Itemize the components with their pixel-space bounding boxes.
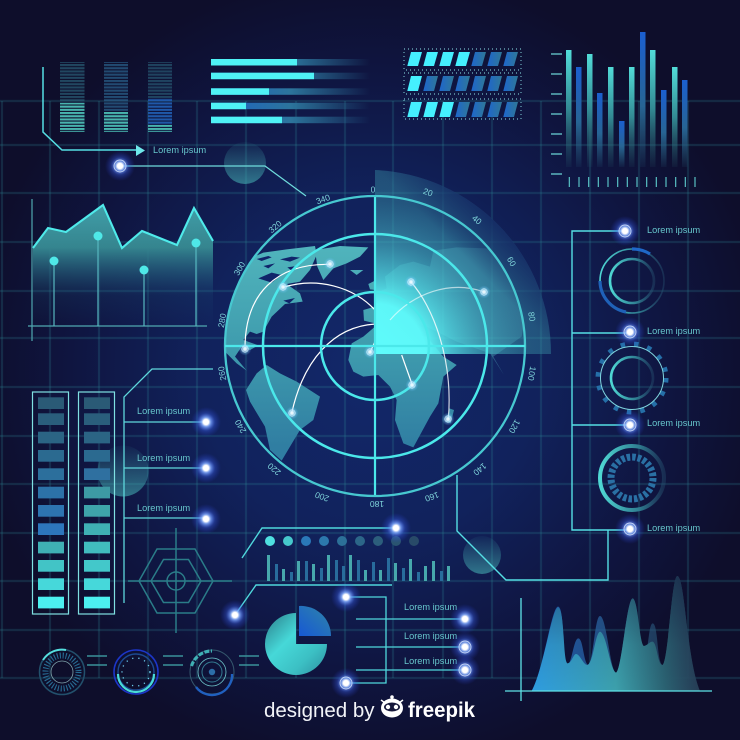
meter left	[32, 392, 68, 614]
degree labels: 20	[422, 186, 434, 199]
panel: central radar with world map	[216, 170, 551, 509]
degree labels: 160	[423, 490, 440, 504]
degree labels: 100	[526, 366, 538, 382]
gauge dashes	[87, 656, 259, 665]
icon: freepik mascot	[381, 695, 403, 718]
decorative translucent circle top	[224, 142, 266, 184]
eurasia	[385, 248, 523, 374]
nodes	[331, 582, 480, 698]
degree labels: 240	[232, 418, 248, 435]
panel: dotted slanted level meter	[404, 49, 521, 119]
peaks	[532, 576, 700, 691]
meter row 3	[407, 102, 518, 117]
connector lines	[124, 369, 213, 603]
degree labels: 140	[471, 461, 489, 478]
connector lines	[457, 231, 630, 580]
labels: Lorem ipsum	[404, 656, 457, 666]
mini bars	[267, 555, 450, 581]
ghost circle	[463, 536, 501, 574]
radar rings	[225, 196, 525, 496]
gauge 3	[190, 650, 234, 695]
map nodes	[238, 258, 490, 426]
labels	[404, 602, 457, 666]
gauge ring 3	[600, 446, 664, 510]
credit line: freepik	[408, 699, 475, 722]
degree labels: 60	[505, 255, 518, 268]
sweep sector	[375, 170, 551, 354]
gauge ring 2	[598, 344, 666, 412]
panel: right gauges and labels	[457, 216, 700, 580]
node	[381, 513, 411, 543]
africa and south europe	[348, 327, 457, 447]
labels: Lorem ipsum	[404, 631, 457, 641]
panel: left level meters and labels	[32, 369, 221, 614]
area outline	[33, 205, 213, 248]
degree labels: 300	[232, 260, 247, 277]
panel: horizontal progress bars	[211, 59, 370, 123]
degree labels: 0	[371, 184, 376, 194]
north america	[220, 246, 317, 371]
node	[220, 600, 250, 630]
labels: Lorem ipsum	[647, 523, 700, 533]
degree labels: 340	[315, 192, 332, 206]
bracket line	[346, 597, 465, 683]
panel: bottom small gauges	[40, 650, 259, 695]
meter right	[78, 392, 114, 614]
degree labels: 180	[370, 499, 384, 509]
europe	[350, 270, 375, 323]
panel: striped column chart with arrow	[43, 62, 206, 156]
label: Lorem ipsum	[153, 145, 206, 155]
background grid	[0, 101, 740, 678]
labels: Lorem ipsum	[137, 406, 190, 416]
degree labels: 40	[470, 213, 484, 227]
greenland	[315, 246, 368, 280]
labels: Lorem ipsum	[647, 225, 700, 235]
degree labels: 320	[266, 218, 284, 235]
panel: pie chart with connector	[220, 585, 392, 675]
degree labels: 120	[507, 418, 522, 435]
arrow head	[136, 145, 145, 156]
degree labels: 280	[216, 312, 228, 328]
panel: area chart with pins	[28, 199, 213, 341]
axes	[505, 598, 712, 701]
nodes	[610, 216, 645, 544]
panel: mountain area chart	[505, 576, 712, 701]
x ticks	[569, 177, 695, 187]
world map	[220, 246, 528, 461]
meter row 1	[407, 52, 518, 66]
axes	[28, 199, 207, 341]
labels: Lorem ipsum	[137, 453, 190, 463]
icon: hexagon target	[128, 528, 232, 633]
south america	[246, 365, 320, 461]
labels: Lorem ipsum	[647, 418, 700, 428]
degree labels: 260	[216, 365, 228, 381]
y ticks	[551, 54, 562, 174]
degree labels: 220	[265, 461, 283, 478]
area fill	[33, 205, 213, 326]
labels: Lorem ipsum	[137, 503, 190, 513]
dots	[265, 536, 419, 546]
route arcs	[245, 264, 483, 419]
gauge 2	[114, 650, 158, 694]
connector	[235, 585, 392, 615]
panel: vertical bar chart top right	[551, 32, 695, 187]
degree labels: 200	[313, 490, 330, 504]
bars	[566, 32, 688, 167]
connector: node to radar	[105, 151, 306, 196]
gauge 1	[40, 650, 84, 694]
connector	[242, 528, 396, 558]
panel: dot row and mini bars	[242, 513, 450, 581]
labels: Lorem ipsum	[647, 326, 700, 336]
pie wedge	[299, 606, 331, 636]
credit line: designed by	[264, 699, 375, 722]
credit line	[264, 695, 475, 722]
meter row 2	[407, 76, 518, 91]
arrow line	[43, 67, 138, 150]
labels: Lorem ipsum	[404, 602, 457, 612]
nodes	[191, 407, 221, 534]
striped columns	[60, 62, 172, 132]
gauge ring 1	[600, 249, 664, 313]
degree labels	[216, 184, 538, 509]
pie	[265, 613, 327, 675]
dotted frames	[404, 49, 521, 119]
pins	[50, 232, 200, 326]
madagascar	[446, 408, 454, 423]
ghost circle	[98, 446, 148, 496]
labels	[647, 225, 700, 533]
panel: list with connectors	[331, 582, 480, 698]
canadian islands	[257, 256, 300, 303]
degree labels: 80	[526, 311, 538, 322]
labels	[137, 406, 190, 513]
